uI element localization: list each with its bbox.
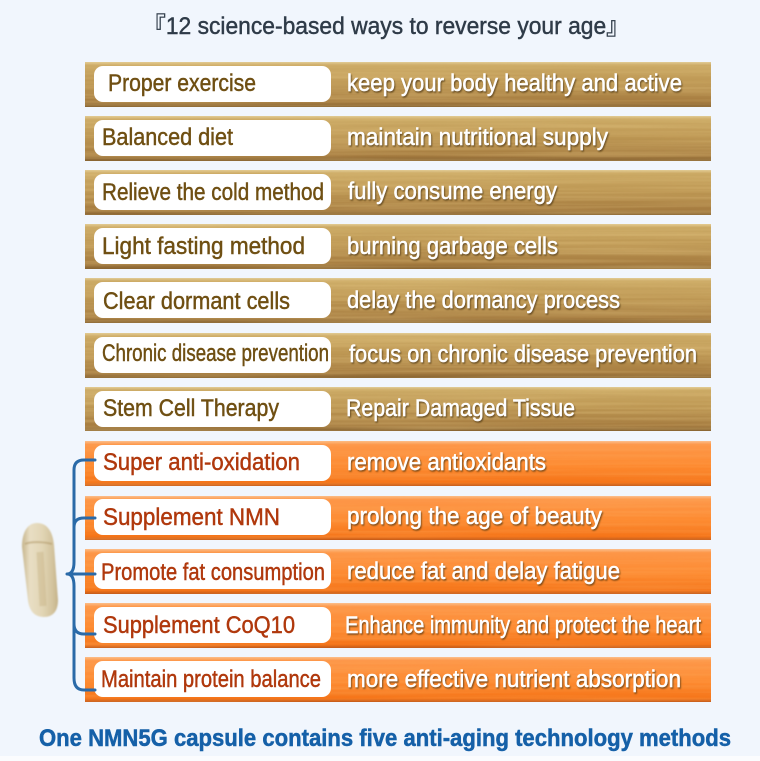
row 10: promote fat consumption: Promote fat consumption xyxy=(101,559,325,586)
row 3: relieve the cold method xyxy=(85,170,711,215)
row 3: relieve the cold method: fully consume energy xyxy=(348,178,557,205)
row 11: supplement CoQ10: Enhance immunity and protect the heart xyxy=(345,612,701,639)
title: 『12 science-based ways to reverse your age』 xyxy=(143,13,629,40)
row 2: balanced diet: maintain nutritional supply xyxy=(347,124,608,151)
row 8: super anti-oxidation: remove antioxidants xyxy=(347,449,546,476)
row 9: supplement NMN: Supplement NMN xyxy=(103,504,280,531)
row 2: balanced diet xyxy=(85,116,711,161)
row 10: promote fat consumption: reduce fat and delay fatigue xyxy=(347,558,620,585)
row 11: supplement CoQ10: Supplement CoQ10 xyxy=(103,612,295,639)
row 5: clear dormant cells xyxy=(85,278,711,323)
row 4: light fasting method: burning garbage cells xyxy=(347,233,558,260)
row 1: proper exercise: keep your body healthy and active xyxy=(347,70,682,97)
row 1: proper exercise: Proper exercise xyxy=(108,70,256,97)
row 7: stem cell therapy: Repair Damaged Tissue xyxy=(346,395,575,422)
row 4: light fasting method: Light fasting method xyxy=(102,233,305,260)
row 12: maintain protein balance xyxy=(85,657,711,702)
row 1: proper exercise xyxy=(85,62,711,107)
row 10: promote fat consumption xyxy=(85,549,711,594)
row 4: light fasting method xyxy=(85,224,711,269)
row 8: super anti-oxidation: Super anti-oxidation xyxy=(103,449,300,476)
row 6: chronic disease prevention xyxy=(85,333,711,378)
row 5: clear dormant cells: Clear dormant cells xyxy=(103,288,290,315)
row 6: chronic disease prevention: focus on chronic disease prevention xyxy=(349,341,697,368)
row 9: supplement NMN: prolong the age of beauty xyxy=(347,503,602,530)
bracket connecting capsule to five methods xyxy=(67,460,95,690)
row 12: maintain protein balance: Maintain protein balance xyxy=(101,666,321,693)
row 12: maintain protein balance: more effective nutrient absorption xyxy=(347,666,681,693)
row 8: super anti-oxidation xyxy=(85,441,711,486)
row 7: stem cell therapy: Stem Cell Therapy xyxy=(103,395,279,422)
row 7: stem cell therapy xyxy=(85,387,711,431)
row 11: supplement CoQ10 xyxy=(85,603,711,648)
row 9: supplement NMN xyxy=(85,496,711,540)
row 3: relieve the cold method: Relieve the cold method xyxy=(102,179,324,206)
icon: capsule xyxy=(22,523,58,617)
row 5: clear dormant cells: delay the dormancy process xyxy=(347,287,620,314)
row 2: balanced diet: Balanced diet xyxy=(102,124,233,151)
row 6: chronic disease prevention: Chronic disease prevention xyxy=(102,340,329,367)
